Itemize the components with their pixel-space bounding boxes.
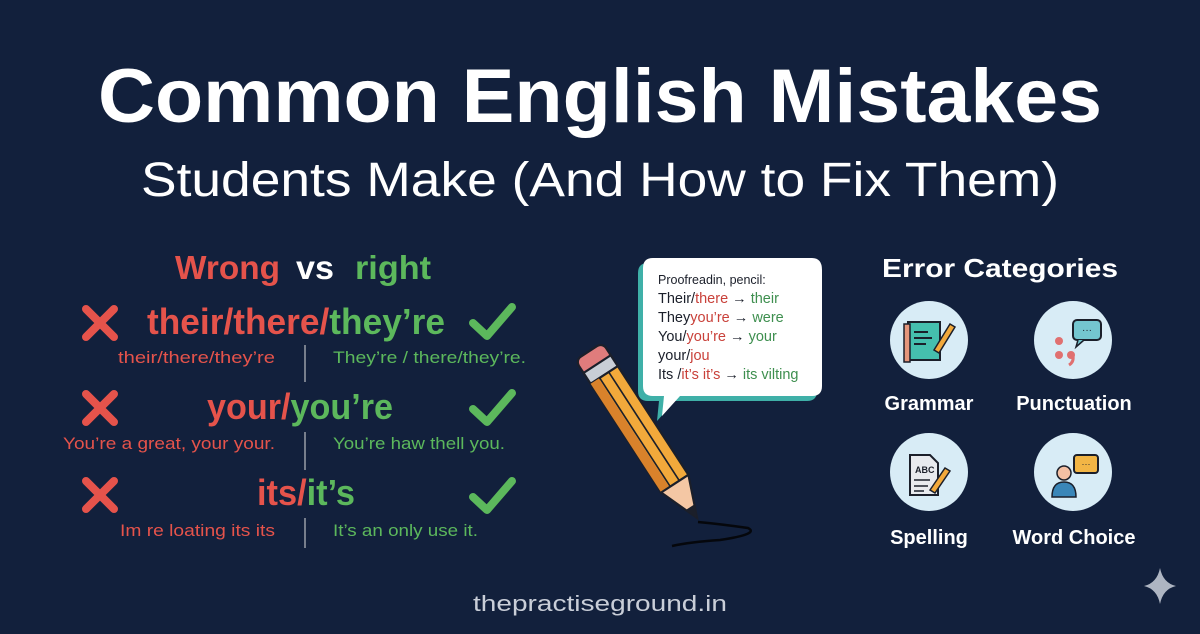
row 1 (86, 301, 526, 382)
row 3: Im re loating its its (120, 521, 275, 540)
label: punctuation: Punctuation (1016, 393, 1132, 415)
label: grammar: Grammar (885, 393, 974, 415)
row 3 (86, 472, 512, 548)
callout: proofreading bubble: Proofreadin, pencil: (658, 273, 766, 287)
row 1: their/there/they’re (147, 301, 445, 342)
icon: word choice: ··· (1082, 459, 1090, 469)
squiggle line (672, 522, 751, 546)
callout: proofreading bubble (638, 258, 822, 421)
heading: error categories: Error Categories (882, 253, 1118, 283)
callout: proofreading bubble: Theyyou’re → were (658, 310, 784, 326)
row 1: their/there/they’re (118, 348, 275, 367)
icon: sparkle (1144, 568, 1176, 604)
icon: word choice (1034, 433, 1112, 511)
footer url: thepractiseground.in (473, 591, 727, 616)
row 2: your/you’re (207, 386, 393, 427)
row 1: They’re / there/they’re. (333, 348, 526, 367)
label: spelling: Spelling (890, 527, 968, 549)
icon: punctuation (1034, 301, 1112, 379)
panel: error categories (882, 253, 1135, 549)
heading: wrong vs right (175, 249, 431, 286)
callout: proofreading bubble: Their/there → their (658, 291, 779, 307)
callout: proofreading bubble: your/jou (658, 348, 710, 364)
icon: grammar (890, 301, 968, 379)
icon: spelling: ABC (915, 465, 935, 475)
heading: wrong vs right: right (355, 249, 431, 286)
row 3: It’s an only use it. (333, 521, 478, 540)
icon: pencil (575, 343, 711, 527)
panel: wrong vs right (63, 249, 526, 548)
callout: proofreading bubble: Its /it’s it’s → its vilting (658, 367, 798, 383)
callout: proofreading bubble: You/you’re → your (658, 329, 777, 345)
heading: wrong vs right: vs (296, 249, 334, 286)
icon: punctuation: ··· (1082, 325, 1092, 336)
subtitle: Students Make (And How to Fix Them) (141, 154, 1059, 207)
icon: spelling (890, 433, 968, 511)
label: word choice: Word Choice (1013, 527, 1135, 549)
row 2: You’re haw thell you. (333, 434, 505, 453)
heading: wrong vs right: Wrong (175, 249, 280, 286)
row 3: its/it’s (257, 472, 355, 513)
row 2: You’re a great, your your. (63, 434, 275, 453)
row 2 (63, 386, 512, 470)
title: Common English Mistakes (98, 54, 1102, 139)
